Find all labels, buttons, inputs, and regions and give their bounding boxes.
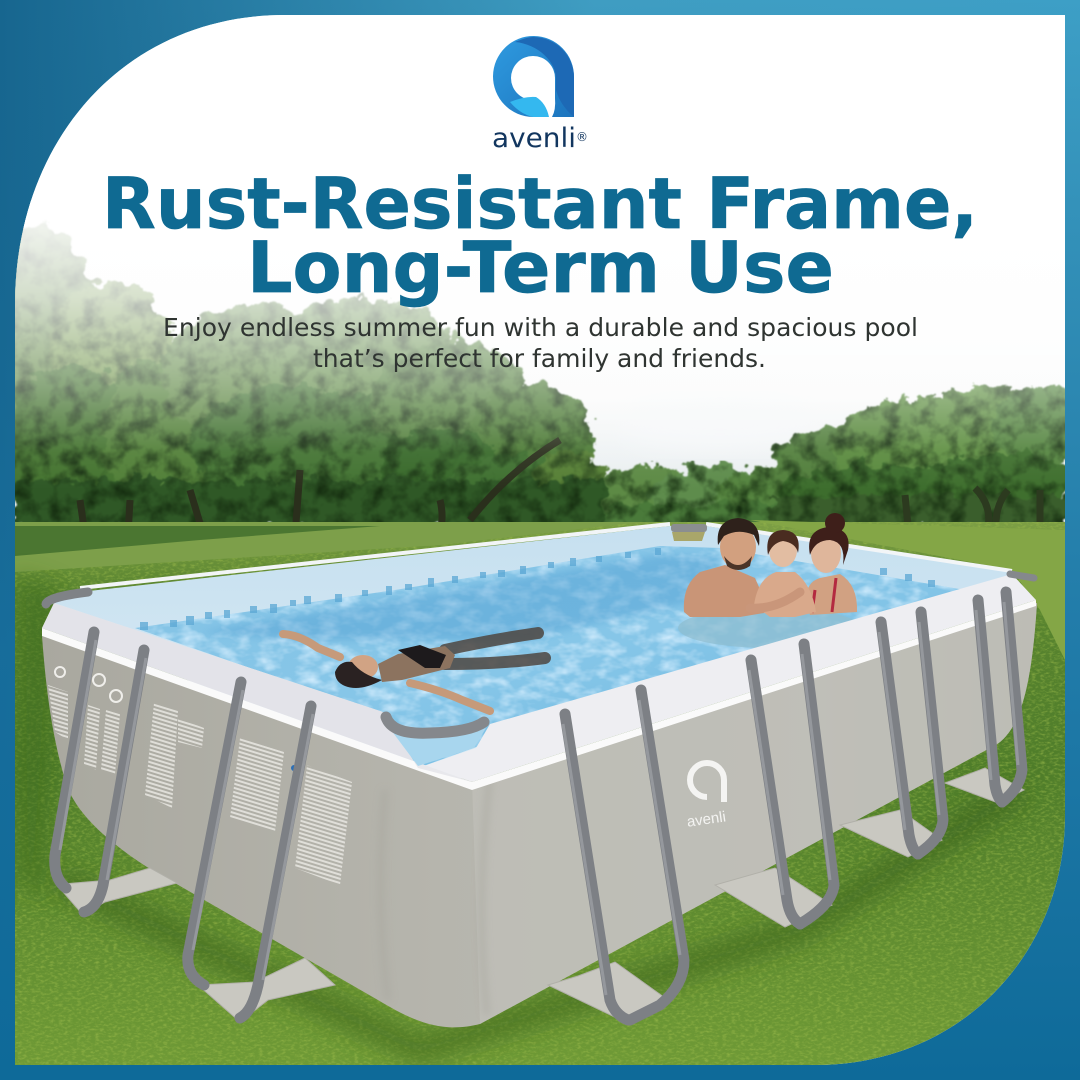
swimmer torso and swimsuit	[378, 646, 455, 682]
swimmer legs	[445, 633, 545, 664]
seam highlights on front corner	[381, 775, 490, 1015]
registered mark: ®	[576, 130, 588, 144]
trees on the right	[770, 386, 1080, 530]
back-right corner handle	[1010, 574, 1034, 578]
logo mark	[493, 36, 574, 117]
back-left corner handle	[46, 592, 88, 604]
white rim	[42, 574, 1036, 782]
right face shading	[472, 603, 1037, 1024]
distant tree line	[600, 460, 780, 522]
rim lower band	[42, 600, 1036, 790]
family in pool	[678, 513, 862, 648]
pool brand mark: avenli	[686, 808, 727, 831]
corner opening water	[393, 728, 486, 766]
front corner handle	[386, 717, 484, 733]
morning fog over treetops	[15, 15, 1065, 490]
swimmer arms	[283, 634, 490, 711]
frame legs	[55, 592, 1022, 1020]
blue seam badge	[291, 765, 294, 771]
right tree trunks	[905, 488, 1040, 528]
support feet	[57, 768, 1024, 1022]
title	[102, 163, 978, 309]
swimmer head and hair	[350, 655, 378, 677]
lawn	[15, 520, 1065, 1065]
pool inner wall	[54, 526, 1012, 790]
brand logo	[492, 36, 588, 154]
pool back rim	[80, 524, 1012, 588]
vinyl body of pool	[42, 603, 1037, 1027]
title: Rust-Resistant Frame,	[102, 163, 978, 245]
warning icons	[55, 667, 122, 702]
mosaic tile band	[140, 548, 935, 630]
left-face warning labels	[48, 685, 352, 885]
sky with clouds	[15, 200, 1065, 530]
trees on the left	[0, 225, 605, 535]
subtitle: Enjoy endless summer fun with a durable and spacious pool	[163, 313, 918, 342]
skimmer	[671, 524, 707, 541]
woman	[806, 513, 857, 615]
water ripples around family	[678, 613, 852, 648]
logo wordmark: avenli	[492, 123, 576, 154]
water	[135, 546, 965, 768]
swimmer	[283, 633, 545, 711]
leg highlights	[60, 602, 1018, 995]
deep water tiles	[200, 555, 720, 640]
subtitle	[163, 313, 918, 373]
child	[750, 530, 816, 617]
pool brand mark	[686, 763, 727, 831]
title: Long-Term Use	[247, 227, 834, 309]
rim shading left	[42, 603, 472, 782]
left tree trunks	[76, 437, 562, 522]
subtitle: that’s perfect for family and friends.	[313, 344, 766, 373]
man	[684, 518, 770, 617]
pool	[42, 513, 1037, 1027]
